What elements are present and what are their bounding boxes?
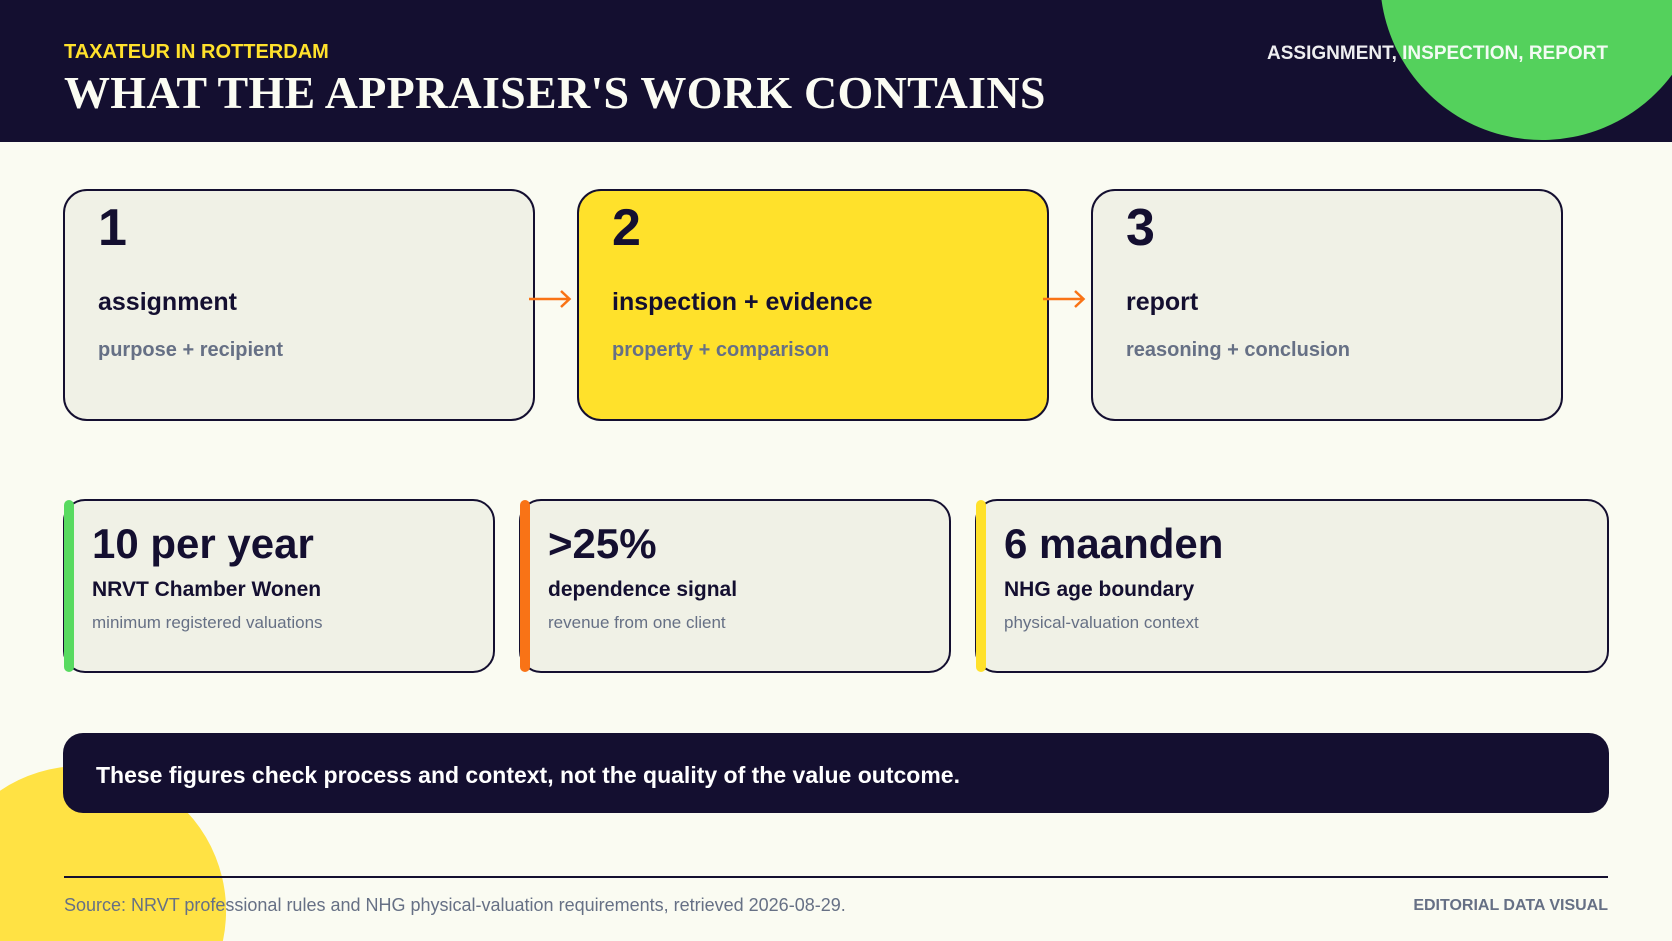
arrow: step 2 to 3 (1043, 290, 1086, 308)
stat label: dependence signal (548, 578, 737, 601)
stat value: >25% (548, 520, 657, 567)
yellow decorative circle (0, 767, 226, 941)
step title: assignment (98, 288, 237, 316)
source note: Source: NRVT professional rules and NHG physical-valuation requirements, retrieved 2026-08-29. (64, 895, 846, 915)
stat value: 10 per year (92, 520, 314, 567)
accent bar (520, 500, 530, 672)
accent bar (976, 500, 986, 672)
step detail: property + comparison (612, 339, 829, 361)
step detail: reasoning + conclusion (1126, 339, 1350, 361)
header band (0, 0, 1672, 142)
step detail: purpose + recipient (98, 339, 283, 361)
callout banner (63, 733, 1609, 813)
callout text: These figures check process and context, not the quality of the value outcome. (96, 762, 960, 788)
step title: report (1126, 288, 1198, 316)
title: WHAT THE APPRAISER'S WORK CONTAINS (64, 67, 1046, 118)
panel: step 3 (1091, 189, 1563, 421)
stat value: 6 maanden (1004, 520, 1223, 567)
panel: stat 10 per year (63, 499, 495, 673)
panel: step 1 (63, 189, 535, 421)
panel: stat age boundary (975, 499, 1609, 673)
stat note: revenue from one client (548, 613, 726, 632)
stat note: physical-valuation context (1004, 613, 1199, 632)
stat note: minimum registered valuations (92, 613, 323, 632)
green decorative circle (1382, 0, 1672, 140)
stat label: NRVT Chamber Wonen (92, 578, 321, 601)
step number: 1 (98, 199, 127, 257)
accent bar (64, 500, 74, 672)
step number: 2 (612, 199, 641, 257)
panel: stat dependence (519, 499, 951, 673)
panel: step 2 (577, 189, 1049, 421)
arrow: step 1 to 2 (529, 290, 572, 308)
eyebrow label: TAXATEUR IN ROTTERDAM (64, 41, 329, 63)
step number: 3 (1126, 199, 1155, 257)
footer tag: EDITORIAL DATA VISUAL (1413, 897, 1608, 914)
header tag: ASSIGNMENT, INSPECTION, REPORT (1267, 43, 1608, 64)
stat label: NHG age boundary (1004, 578, 1194, 601)
step title: inspection + evidence (612, 288, 873, 316)
